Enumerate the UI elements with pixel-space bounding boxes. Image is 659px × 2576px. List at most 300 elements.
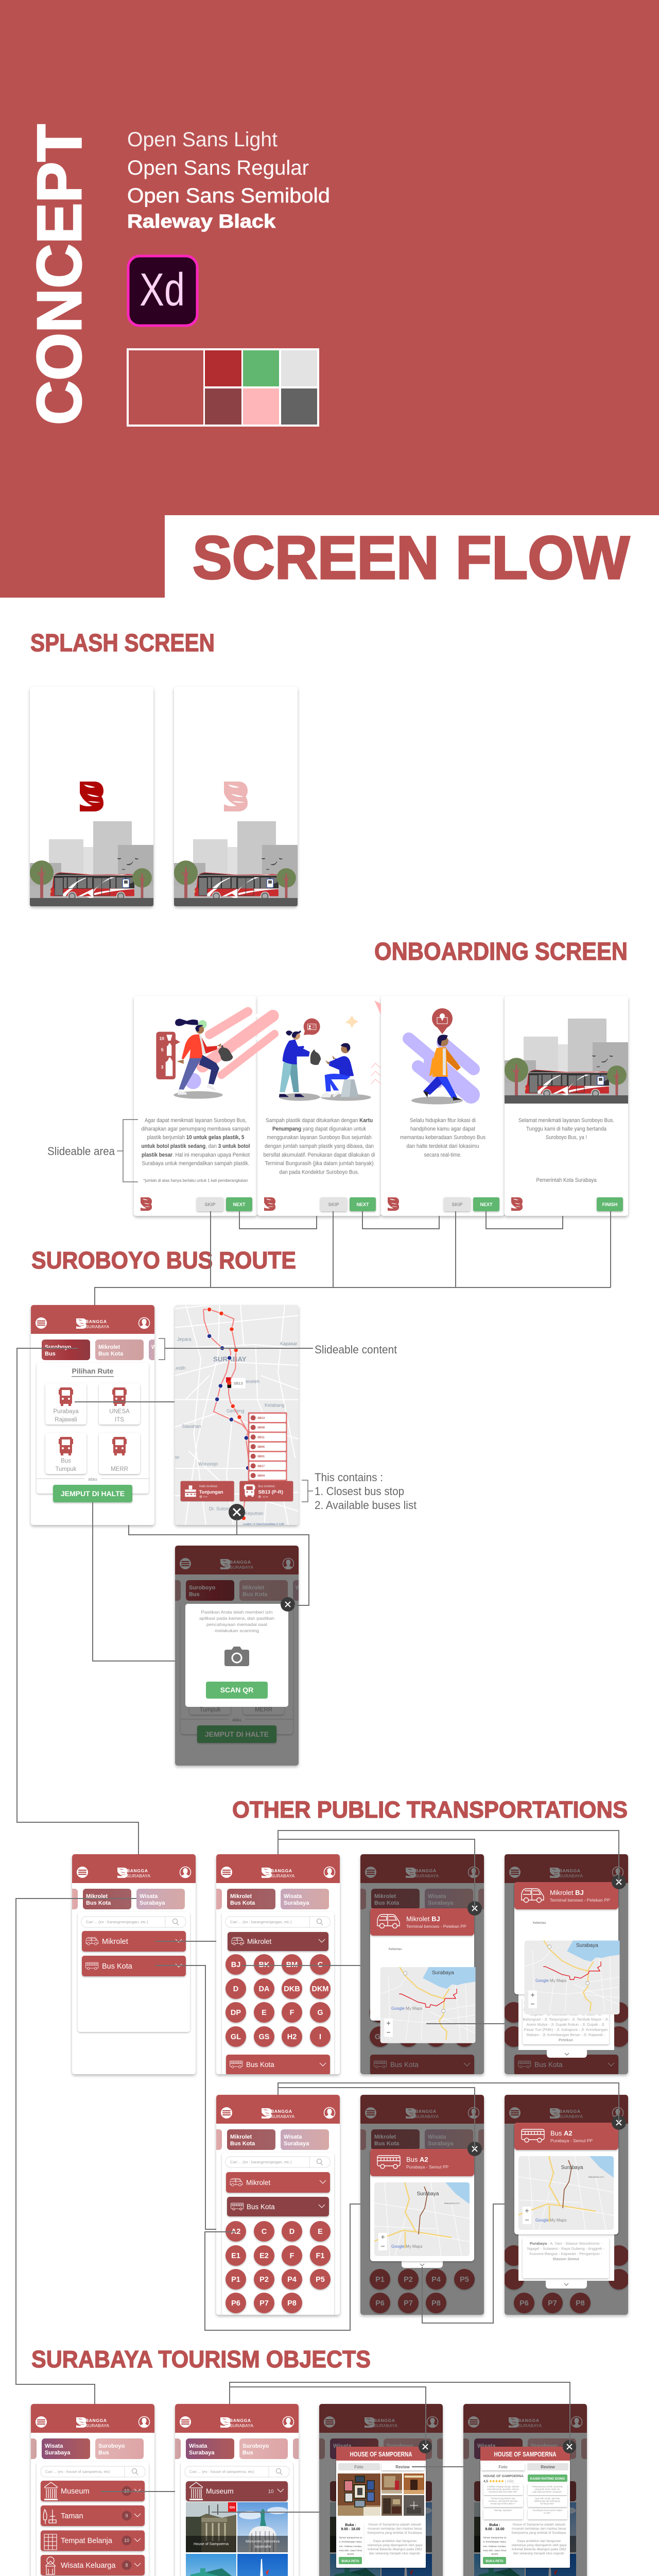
modal: bus A2 detail: PAKUWON CITY — [588, 2176, 604, 2178]
modal: house of sampoerna reviews: terasa lagi selama disini !" — [491, 2502, 516, 2505]
phone: bus kota routes: Mikrolet — [230, 2134, 252, 2140]
text block: onboarding 1: Surabaya untuk mengendalikan sampah plastik. — [142, 1160, 249, 1166]
phone: bus kota routes: C — [262, 2228, 267, 2236]
heading: concept: CONCEPT — [24, 124, 94, 425]
modal: scan QR: pencahayaan memadai saat — [206, 1622, 268, 1627]
phone: bus kota routes: E1 — [231, 2252, 240, 2260]
map labels — [174, 1336, 297, 1516]
text block: onboarding 2: dengan jumlah sampah plastik yang dibawa, dan — [265, 1143, 374, 1149]
phone: bus A2 route detail: SURABAYA — [559, 2114, 583, 2119]
text block: onboarding 4: Tunggu kami di halte yang bertanda — [526, 1126, 607, 1132]
modal: house of sampoerna reviews: "jauh dari rumah, tapi bisa — [535, 2497, 560, 2500]
modal: bus A2 detail: Bus A2 — [550, 2129, 573, 2137]
illustration: handing over bag — [279, 1001, 381, 1101]
modal: bus A2 detail: Ngagel - Sulawesi - Raya Gubeng - Anggrek - — [527, 2246, 605, 2251]
phone: tourism categories: Surabaya — [45, 2450, 71, 2456]
phone: museum list — [170, 2404, 303, 2576]
phone: tourism categories: Cari ... (ex : house of sampoerna, etc) — [45, 2469, 110, 2474]
available buses list: SB01 — [257, 1455, 265, 1459]
phone: transport list: SURABAYA — [127, 1873, 150, 1878]
phone: mikrolet BJ route detail — [504, 1854, 629, 2075]
available buses list: SB13 — [257, 1417, 265, 1420]
panel: splash screen 1 — [30, 687, 153, 906]
phone: bus kota routes — [211, 2095, 340, 2317]
phone: museum list: Suroboyo — [242, 2443, 269, 2449]
modal: house of sampoerna info: Kota SBY, Jawa Timur — [339, 2549, 362, 2552]
phone: house of sampoerna photos: Wisata — [333, 2443, 352, 2449]
phone: house of sampoerna photos — [314, 2404, 447, 2576]
phone: route choice — [31, 1305, 159, 1525]
phone: museum list: Wisata — [189, 2443, 207, 2449]
phone: bus A2 map: Mikrolet — [374, 2134, 396, 2140]
modal: house of sampoerna reviews: juga tiada penataan ruangnya" — [532, 2490, 562, 2493]
heading: surabaya tourism objects: SURABAYA TOURISM OBJECTS — [31, 2346, 371, 2372]
phone: mikrolet routes: DKB — [284, 1985, 300, 1993]
phone: mikrolet routes — [211, 1854, 340, 2077]
modal: house of sampoerna info: BUKA PETA — [341, 2560, 359, 2563]
map labels: eneleh — [246, 1379, 259, 1384]
text block: onboarding 4: Pemerintah Kota Surabaya — [536, 1177, 597, 1183]
modal: house of sampoerna info: Kec. Pabean Cantian, — [339, 2545, 362, 2548]
phone: bus kota routes: Wisata — [284, 2134, 302, 2140]
modal: bus A2: Bus A2 — [406, 2156, 428, 2163]
phone: bus kota routes: P2 — [259, 2276, 269, 2284]
phone: route choice: Bus — [61, 1458, 71, 1464]
phone: house of sampoerna reviews: Suroboyo — [531, 2443, 558, 2449]
phone: mikrolet routes: DP — [231, 2009, 241, 2017]
modal: bus A2 detail: Purabaya - Semut PP — [550, 2138, 593, 2143]
phone: bus kota routes: P6 — [231, 2299, 240, 2308]
icon: Adobe XD — [128, 256, 197, 326]
phone: scan QR modal: Tumpuk — [199, 1707, 221, 1713]
card: closest bus stop: Halte terdekat — [199, 1485, 217, 1488]
modal: house of sampoerna reviews: 9.00 - 18.00 — [485, 2528, 505, 2531]
text block: onboarding 1: *jumlah di atas hanya berlaku untuk 1 kali pemberangkatan — [143, 1178, 248, 1183]
modal: mikrolet BJ detail: Kebomas — [533, 1922, 546, 1925]
phone: route choice: Bus — [45, 1351, 56, 1357]
phone: mikrolet routes: DA — [259, 1985, 270, 1993]
phone: bus A2 map: Surabaya — [428, 2141, 454, 2147]
text block: onboarding 4: Selamat menikmati layanan Suroboyo Bus. — [518, 1117, 614, 1124]
onboarding buttons and logos: SKIP — [204, 1202, 216, 1207]
text block: onboarding 2: bersifat akumulatif. Penukaran dapat dilakukan di — [264, 1152, 375, 1158]
modal: house of sampoerna reviews: museum tembakau dan markas besar — [512, 2527, 566, 2531]
phone: bus A2 map: P4 — [431, 2276, 441, 2284]
phone: bus kota routes: P5 — [316, 2276, 325, 2284]
callout: slideable content — [159, 1338, 397, 1360]
heading: onboarding screen: ONBOARDING SCREEN — [374, 938, 628, 965]
callout: this contains: 2. Available buses list — [315, 1499, 417, 1512]
phone: mikrolet routes: GL — [231, 2033, 241, 2041]
phone: tourism categories: Tempat Belanja — [61, 2537, 113, 2545]
phone: route choice: Pilihan Rute — [72, 1367, 114, 1375]
phone: bus kota routes: P4 — [287, 2276, 297, 2284]
modal: house of sampoerna reviews: kolonial Belanda dibangun pada 1862 — [512, 2548, 566, 2551]
modal: mikrolet BJ detail: Jl. Raya Sememi - Jl. Raya Kandangan - Jl. Banjar — [523, 2007, 609, 2011]
illustration: walking man with location pin — [409, 1008, 474, 1105]
heading: splash screen: SPLASH SCREEN — [30, 630, 215, 657]
phone: bus A2 map: P1 — [375, 2276, 385, 2284]
phone: mikrolet routes: Cari ... (ex : karangmenjangan, etc.) — [230, 1920, 292, 1924]
modal: house of sampoerna info: House of Sampoerna adalah sebuah — [369, 2523, 422, 2527]
card: closest bus — [239, 1481, 293, 1501]
phone: mikrolet routes: BM — [286, 1961, 298, 1969]
text block: onboarding 1: plastik besar. Hal ini merupakan upaya Pemkot — [142, 1152, 250, 1158]
phone: tourism categories: BANGGA — [85, 2418, 107, 2423]
modal: house of sampoerna info: Gaya arsitektur dari bangunan — [373, 2539, 417, 2543]
modal: mikrolet BJ: Mikrolet BJ — [406, 1915, 440, 1923]
phone: tourism categories: Taman — [61, 2512, 83, 2520]
phone: bus A2 map: SURABAYA — [415, 2114, 439, 2119]
phone: tourism categories: SURABAYA — [85, 2423, 109, 2428]
text block: onboarding 2: menggunakan layanan Suroboyo Bus sejumlah — [267, 1134, 372, 1141]
map labels: Jepara — [177, 1336, 191, 1342]
modal: house of sampoerna reviews: BUKA PETA — [485, 2560, 504, 2563]
phone: scan QR modal: MERR — [255, 1707, 272, 1713]
modal: scan QR — [185, 1597, 295, 1707]
modal: house of sampoerna reviews: Foto — [498, 2465, 508, 2469]
phone: mikrolet routes: Bus Kota — [230, 1900, 255, 1906]
modal: mikrolet BJ: Kebomas — [389, 1948, 402, 1951]
phone: mikrolet routes: BJ — [231, 1961, 240, 1969]
modal: bus A2 detail: Kusuma Bangsa - Kapasari - Pengampon - — [530, 2251, 602, 2256]
illustration: woman with plastic bag: 5 — [161, 1047, 164, 1053]
modal: mikrolet BJ — [370, 1901, 482, 2043]
text block: onboarding 3: dan halte terdekat dari lokasimu — [407, 1143, 479, 1149]
modal: house of sampoerna reviews: HOUSE OF SAMPOERNA — [483, 2475, 524, 2478]
phone: bus kota routes: Bus Kota — [247, 2203, 275, 2211]
phone: house of sampoerna photos: SURABAYA — [374, 2423, 397, 2428]
modal: house of sampoerna reviews: in meh" — [544, 2512, 551, 2514]
phone: house of sampoerna reviews — [458, 2404, 592, 2576]
modal: house of sampoerna info: utamanya yang dipengaruhi oleh gaya — [368, 2544, 423, 2547]
arrows: tourism flow — [101, 2382, 570, 2512]
callout: slideable area — [47, 1120, 138, 1182]
text block: onboarding 1: untuk botol plastik sedang, dan 3 untuk botol — [141, 1143, 250, 1149]
phone: scan QR modal: atau — [232, 1717, 241, 1722]
phone: mikrolet routes: F — [290, 2009, 294, 2017]
callout: slideable area: Slideable area — [47, 1145, 115, 1158]
phone: transport list: Mikrolet — [102, 1938, 128, 1946]
icon: Adobe XD: Xd — [140, 264, 185, 316]
phone: museum list: House of Sampoerna — [194, 2541, 229, 2546]
phone: mikrolet routes: Wisata — [284, 1893, 302, 1900]
phone: route choice: Bus Kota — [98, 1351, 124, 1357]
map labels: Dr. Sutomo — [209, 1506, 232, 1511]
phone: scan QR modal: Bus Kota — [242, 1591, 268, 1598]
modal: house of sampoerna reviews: utamanya yang dipengaruhi oleh gaya — [512, 2544, 567, 2547]
onboarding buttons and logos — [141, 1197, 623, 1211]
phone: mikrolet routes: DKM — [311, 1985, 329, 1993]
modal: house of sampoerna reviews: ada kafenya iho guessss. kalo ke — [487, 2488, 519, 2490]
map labels: an — [174, 1455, 179, 1460]
phone: bus kota routes: Mikrolet — [246, 2179, 271, 2187]
phone: bus kota routes: A2 — [231, 2228, 240, 2236]
modal: house of sampoerna reviews: keliling lagi naik tebengnya — [534, 2500, 561, 2502]
modal: house of sampoerna reviews: House of Sampoerna adalah sebuah — [513, 2523, 566, 2527]
phone: mikrolet BJ map: Wisata — [428, 1893, 446, 1900]
map labels: Sawahan — [182, 1424, 201, 1429]
map roads — [175, 1303, 299, 1525]
illustration: woman with plastic bag — [156, 1011, 274, 1099]
arrows: public transportation flow — [16, 1831, 619, 2404]
phone: bus kota routes: E2 — [259, 2252, 269, 2260]
map labels: SURABAY — [213, 1355, 247, 1363]
phone: mikrolet routes: BK — [259, 1961, 270, 1969]
onboarding buttons and logos: NEXT — [480, 1202, 493, 1207]
modal: bus A2 detail — [514, 2115, 626, 2289]
phone: bus A2 route detail — [504, 2095, 629, 2315]
modal: house of sampoerna reviews: Review — [541, 2465, 556, 2469]
modal: house of sampoerna info: 6, Krembangan Utara, — [339, 2540, 362, 2543]
phone: tourism categories: 9 — [125, 2513, 128, 2518]
modal: mikrolet BJ: Google My Maps — [391, 2006, 422, 2011]
phone: scan QR modal: BANGGA — [230, 1560, 251, 1565]
modal: house of sampoerna reviews: "Museum lagi bukan rasa — [491, 2497, 515, 2500]
phone: house of sampoerna reviews: SURABAYA — [518, 2423, 542, 2428]
modal: house of sampoerna reviews: Sampoerna yang terletak di Surabaya. — [511, 2531, 567, 2535]
phone: mikrolet routes: E — [262, 2009, 267, 2017]
phone: tourism categories: 10 — [124, 2488, 129, 2494]
text block: onboarding 2: Sampah plastik dapat ditukarkan dengan Kartu — [266, 1117, 373, 1124]
onboarding buttons and logos: SKIP — [328, 1202, 339, 1207]
phone: route choice: Suroboyo — [45, 1344, 72, 1350]
phone: mikrolet routes: BANGGA — [271, 1868, 292, 1873]
bus marker with label: SB13 — [234, 1381, 243, 1385]
phone: bus A2 map: P2 — [404, 2276, 413, 2284]
phone: museum list: Surabaya — [189, 2450, 215, 2456]
card: closest bus stop: Tunjungan — [199, 1489, 223, 1495]
phone: route choice: BANGGA — [85, 1319, 107, 1324]
phone: mikrolet BJ map: H2 — [431, 2033, 441, 2041]
text block: onboarding 2 — [264, 1117, 375, 1176]
phone: transport list: Wisata — [140, 1893, 158, 1900]
phone: route choice: Rajawali — [55, 1417, 77, 1423]
text block: font list: Open Sans Light — [127, 128, 278, 151]
phone: route choice: Tumpuk — [55, 1466, 77, 1472]
modal: bus A2: Purabaya - Semut PP — [406, 2164, 449, 2170]
modal: mikrolet BJ: Surabaya — [432, 1970, 454, 1976]
phone: house of sampoerna photos: Suroboyo — [387, 2443, 413, 2449]
modal: mikrolet BJ detail: Surabaya — [576, 1943, 598, 1948]
modal: house of sampoerna reviews: "Mantap, lanjutkan" — [494, 2509, 513, 2512]
modal: bus A2 detail: Google My Maps — [535, 2218, 566, 2223]
phone: mikrolet BJ map: GS — [403, 2033, 414, 2041]
modal: bus A2: PAKUWON CITY — [444, 2202, 460, 2205]
phone: mikrolet BJ route detail: BANGGA — [559, 1868, 580, 1873]
modal: house of sampoerna reviews: "Surabaya's best tourism object — [532, 2509, 563, 2512]
available buses list: SB05 — [257, 1446, 265, 1449]
phone: bus kota routes: BANGGA — [271, 2109, 292, 2114]
modal: house of sampoerna info: 9.00 - 18.00 — [341, 2528, 360, 2531]
modal: house of sampoerna reviews: Kota SBY, Jawa Timur — [483, 2549, 507, 2552]
bus stop markers — [207, 1307, 250, 1520]
phone: bus kota routes: P8 — [287, 2299, 297, 2308]
modal: scan QR: Pastikan Anda telah memberi izin — [201, 1610, 273, 1615]
modal: mikrolet BJ detail: Google My Maps — [535, 1978, 566, 1983]
modal: bus A2 detail: Purabaya - A. Yani - Stasiun Wonokromo - — [530, 2241, 602, 2246]
modal: house of sampoerna info: Taman Sampoerna no — [339, 2536, 362, 2539]
phone: tourism categories: 8 — [125, 2563, 128, 2568]
bus marker with label — [226, 1377, 246, 1388]
phone: mikrolet BJ map: GL — [375, 2033, 385, 2041]
modal: house of sampoerna info: Sampoerna yang terletak di Surabaya. — [367, 2531, 423, 2535]
phone: route choice: MERR — [111, 1466, 128, 1472]
phone: museum list: Jayamahe — [254, 2544, 271, 2549]
map labels: Genteng — [227, 1408, 244, 1413]
phone: bus A2 route detail: BANGGA — [559, 2109, 580, 2114]
modal: mikrolet BJ detail: Asem Mulya - Jl. Dupak Rukun - Jl. Dupak - Jl. — [527, 2022, 605, 2027]
phone: route choice: atau — [88, 1477, 97, 1482]
phone: house of sampoerna photos: BANGGA — [374, 2418, 395, 2423]
phone: mikrolet BJ map: I — [463, 2033, 465, 2041]
phone: tourism categories: Wisata Keluarga — [61, 2562, 116, 2570]
phone: museum list: Bus — [242, 2450, 253, 2456]
modal: house of sampoerna info: Buka : — [345, 2523, 356, 2527]
modal: house of sampoerna reviews: Surabaya dikit nasi kayls deh" — [489, 2490, 517, 2493]
phone: route choice: JEMPUT DI HALTE — [61, 1489, 125, 1498]
modal: house of sampoerna reviews: dan sekarang menjadi situs sejarah. — [513, 2552, 565, 2555]
text block: onboarding 3: handphone kamu agar dapat — [410, 1126, 475, 1132]
phone: bus kota routes: Cari ... (ex : karangmenjangan, etc.) — [230, 2160, 292, 2164]
button: close map — [229, 1504, 245, 1520]
phone: bus kota routes: SURABAYA — [271, 2114, 294, 2119]
heading: other public transportations: OTHER PUBLIC TRANSPORTATIONS — [232, 1797, 628, 1823]
phone: bus A2 map — [355, 2095, 489, 2315]
modal: scan QR: aplikasi pada kamera, dan pastikan — [199, 1616, 274, 1621]
phone: mikrolet BJ map: Surabaya — [428, 1900, 454, 1906]
phone: bus A2 map: Wisata — [428, 2134, 446, 2140]
phone: mikrolet routes: G — [317, 2009, 323, 2017]
phone: bus A2 map: P7 — [404, 2299, 413, 2308]
text block: onboarding 3: Selalu hidupkan fitur lokasi di — [410, 1117, 476, 1124]
text block: onboarding 2: Terminal Bungurasih (jika dalam jumlah banyak) — [265, 1160, 374, 1166]
panel: splash screen 2 — [174, 687, 298, 906]
modal: house of sampoerna info — [336, 2440, 432, 2568]
map labels: Keputran — [245, 1511, 263, 1516]
phone: mikrolet BJ map: SURABAYA — [415, 1873, 439, 1878]
phone: bus kota routes: P1 — [231, 2276, 240, 2284]
heading: suroboyo bus route: SUROBOYO BUS ROUTE — [31, 1247, 296, 1274]
phone: museum list: IDN — [230, 2506, 235, 2510]
available buses list: SB11 — [257, 1436, 265, 1439]
arrows: onboarding flow — [95, 1211, 611, 1305]
modal: house of sampoerna info: Review — [395, 2465, 410, 2469]
onboarding buttons and logos: NEXT — [356, 1202, 369, 1207]
phone: transport list: Surabaya — [140, 1900, 165, 1906]
phone: house of sampoerna reviews: Wisata — [477, 2443, 496, 2449]
callout: this contains: 1. Closest bus stop — [315, 1485, 404, 1498]
phone: bus A2 route detail: P7 — [548, 2299, 557, 2308]
phone: mikrolet routes: Bus Kota — [246, 2061, 274, 2069]
text block: onboarding 1: diharapkan agar penumpang membawa sampah — [141, 1126, 250, 1132]
text block: onboarding 2: Penumpang yang dapat digunakan untuk — [272, 1126, 366, 1132]
phone: mikrolet routes: Surabaya — [284, 1900, 309, 1906]
map labels: Kapasar — [280, 1341, 297, 1346]
modal: house of sampoerna info: Foto — [354, 2465, 363, 2469]
heading: screen flow: SCREEN FLOW — [193, 524, 630, 592]
phone: mikrolet BJ route detail: Bus Kota — [534, 2061, 563, 2069]
modal: house of sampoerna info: kolonial Belanda dibangun pada 1862 — [368, 2548, 422, 2551]
modal: mikrolet BJ detail: Petekan — [559, 2038, 574, 2042]
modal: bus A2: Surabaya — [417, 2191, 439, 2197]
attribution: Leaflet | © OpenStreetMap © CAF — [243, 1522, 285, 1526]
text block: onboarding 4: Suroboyo Bus, ya ! — [546, 1134, 587, 1141]
modal: house of sampoerna reviews: yang baik, keren selain itu — [535, 2488, 560, 2490]
phone: scan QR modal: Bus — [189, 1591, 200, 1598]
modal: house of sampoerna info: 60163 — [348, 2553, 354, 2555]
phone: tourism categories: 10 — [124, 2538, 129, 2543]
phone: bus kota routes: P7 — [259, 2299, 269, 2308]
modal: mikrolet BJ: Terminal benowo - Petekan PP — [406, 1924, 466, 1929]
phone: bus kota routes: E — [318, 2228, 323, 2236]
phone: museum list: 10 — [268, 2489, 274, 2495]
modal: mikrolet BJ detail: Pasar Turi (PMK) - Jl. Indrapura - Jl. Krembangan — [524, 2027, 608, 2032]
illustration: bus scene — [505, 1019, 628, 1104]
phone: route choice: W — [151, 1344, 157, 1350]
background: concept panel — [0, 0, 659, 598]
available buses list: SB04 — [257, 1475, 265, 1478]
phone: tourism categories — [26, 2404, 154, 2576]
colour palette — [127, 348, 319, 427]
modal: house of sampoerna reviews: Suroboyo Bus" — [540, 2502, 554, 2505]
phone: mikrolet BJ map: Bus Kota — [374, 1900, 400, 1906]
modal: bus A2 detail: Stasiun Semut — [552, 2257, 579, 2261]
phone: scan QR modal: Mikrolet — [242, 1585, 265, 1591]
phone: scan QR modal: W — [296, 1585, 301, 1591]
card: closest bus stop: 0 m — [203, 1496, 207, 1498]
modal: bus A2: Google My Maps — [391, 2244, 422, 2249]
text block: onboarding 4 — [518, 1117, 614, 1183]
phone: museum list: Cari ... (ex : house of sampoerna, etc) — [189, 2469, 254, 2474]
modal: house of sampoerna reviews: Kec. Pabean Cantian, — [483, 2545, 506, 2548]
phone: bus A2 map: P6 — [375, 2299, 385, 2308]
bus route lines — [203, 1310, 251, 1518]
phone: bus A2 route detail: P6 — [519, 2299, 529, 2308]
phone: mikrolet routes: D — [233, 1985, 238, 1993]
phone: bus kota routes: Bus Kota — [230, 2141, 255, 2147]
arrows: route flow — [17, 1348, 313, 1854]
onboarding buttons and logos: NEXT — [233, 1202, 246, 1207]
text block: onboarding 1: plastik berjumlah 10 untuk gelas plastik, 5 — [147, 1134, 244, 1141]
card: closest bus: 12 m — [263, 1496, 268, 1498]
text block: font list — [127, 128, 330, 232]
phone: scan QR modal: JEMPUT DI HALTE — [205, 1730, 269, 1738]
text block: onboarding 3: secara real-time. — [424, 1152, 461, 1158]
phone: museum list: Museum — [206, 2487, 234, 2495]
modal: bus A2 — [370, 2142, 482, 2268]
phone: museum list: Monumen Jalesveva — [246, 2539, 280, 2544]
text block: onboarding 2: dan pada Kondektur Suroboyo Bus. — [279, 1170, 359, 1176]
phone: transport list: Bus Kota — [102, 1962, 133, 1971]
text block: onboarding 3 — [400, 1117, 485, 1158]
modal: mikrolet BJ detail — [514, 1875, 626, 2058]
phone: mikrolet routes: H2 — [287, 2033, 297, 2041]
phone: museum list: BANGGA — [230, 2418, 251, 2423]
text block: onboarding 1 — [141, 1117, 250, 1183]
modal: mikrolet BJ detail: Mikrolet BJ — [550, 1889, 584, 1896]
phone: bus kota routes: Surabaya — [284, 2141, 309, 2147]
modal: mikrolet BJ detail: Terminal Benowo - Jl. Pakal - Jl. Babat Jerawat - — [524, 2002, 608, 2006]
modal: bus A2 detail: Surabaya — [561, 2165, 583, 2171]
map labels: undih — [174, 1366, 185, 1371]
modal: house of sampoerna reviews: "Fasilitas lengkap banget, bahkan — [487, 2485, 519, 2488]
phone: mikrolet routes: Mikrolet — [247, 1938, 272, 1945]
modal: mikrolet BJ detail: Sugihan - Jl. Manukan Kulon - Jl. Bibis - Jl. — [530, 2012, 602, 2016]
modal: house of sampoerna info: HOUSE OF SAMPOERNA — [350, 2450, 412, 2458]
modal: scan QR: SCAN QR — [220, 1686, 253, 1694]
modal: house of sampoerna reviews: "Pelayanannya ramah, pemandu — [532, 2485, 563, 2488]
